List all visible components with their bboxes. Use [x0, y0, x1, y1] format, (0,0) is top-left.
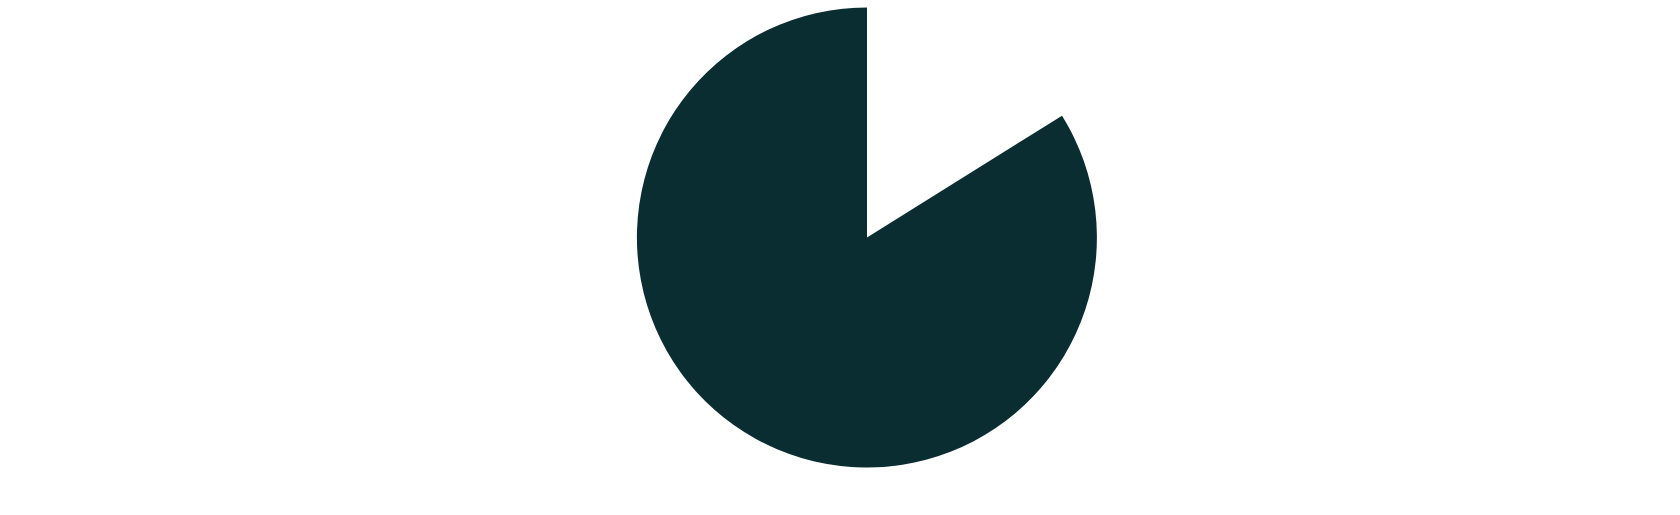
pie slice: large dark segment [637, 7, 1097, 468]
